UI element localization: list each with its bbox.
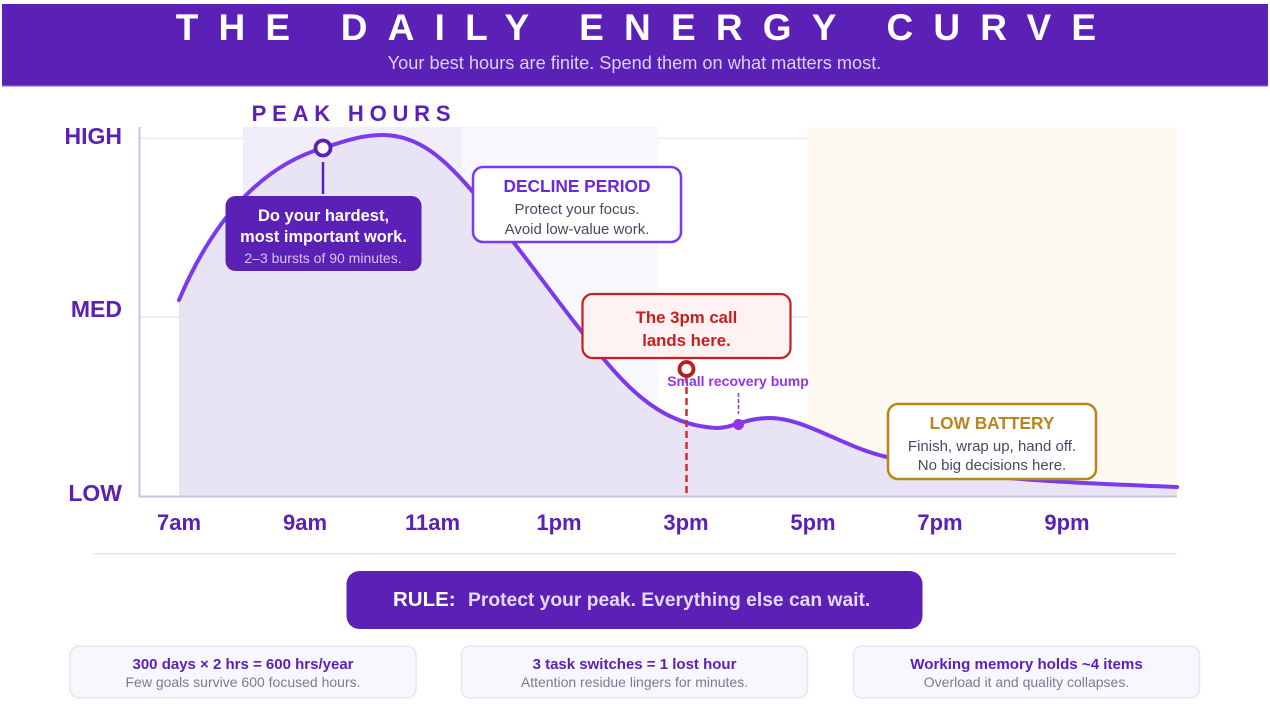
callout: decline period xyxy=(473,167,681,242)
stat card: 600 hours: 300 days × 2 hrs = 600 hrs/year xyxy=(132,656,354,673)
title: THE DAILY ENERGY CURVE xyxy=(176,7,1116,48)
rule banner xyxy=(346,571,922,629)
y axis labels: MED xyxy=(71,296,122,322)
stat card: 600 hours: Few goals survive 600 focused hours. xyxy=(125,674,361,690)
stat card: working memory: Working memory holds ~4 items xyxy=(910,656,1143,673)
stat card: task switches: Attention residue lingers for minutes. xyxy=(521,674,748,690)
x axis labels: 7am xyxy=(157,510,201,535)
y axis labels: HIGH xyxy=(64,123,122,149)
rule banner: Protect your peak. Everything else can wait. xyxy=(468,590,870,611)
axes xyxy=(140,127,1177,496)
x axis labels: 1pm xyxy=(536,510,582,535)
x axis labels: 3pm xyxy=(663,510,709,535)
callout: low battery: No big decisions here. xyxy=(918,457,1066,474)
band: low battery xyxy=(808,127,1177,497)
x axis labels: 9am xyxy=(283,510,327,535)
y axis labels xyxy=(64,123,122,506)
stat card: task switches xyxy=(462,646,808,698)
callout: 3pm call: The 3pm call xyxy=(636,308,737,327)
x axis labels xyxy=(157,510,1090,535)
area under curve xyxy=(179,135,1177,497)
x axis labels: 9pm xyxy=(1044,510,1090,535)
callout: decline period: Protect your focus. xyxy=(514,201,640,218)
rule banner: RULE: xyxy=(393,588,456,611)
callout: decline period: DECLINE PERIOD xyxy=(504,176,650,196)
stat card: working memory xyxy=(854,646,1200,698)
3pm marker xyxy=(680,362,694,495)
callout: low battery xyxy=(888,404,1096,479)
callout: peak work xyxy=(226,196,422,271)
x axis labels: 7pm xyxy=(917,510,963,535)
stat card: working memory: Overload it and quality collapses. xyxy=(924,674,1129,690)
y axis labels: LOW xyxy=(68,480,122,506)
stat card: 600 hours xyxy=(70,646,416,698)
energy curve xyxy=(179,135,1177,487)
callout: low battery: Finish, wrap up, hand off. xyxy=(908,438,1076,455)
callout: peak work: Do your hardest, xyxy=(258,207,389,225)
callout: 3pm call: lands here. xyxy=(642,331,731,350)
band: decline period xyxy=(462,127,658,497)
callout: low battery: LOW BATTERY xyxy=(930,413,1055,433)
chart xyxy=(64,101,1177,535)
x axis labels: 5pm xyxy=(790,510,836,535)
stat card: task switches: 3 task switches = 1 lost hour xyxy=(533,656,737,673)
header banner xyxy=(2,4,1268,86)
recovery bump label xyxy=(667,373,809,430)
peak hours label: PEAK HOURS xyxy=(252,101,456,126)
recovery bump label: Small recovery bump xyxy=(667,373,809,389)
peak marker xyxy=(316,140,330,194)
callout: decline period: Avoid low-value work. xyxy=(505,221,649,238)
callout: peak work: most important work. xyxy=(240,228,407,246)
subtitle: Your best hours are finite. Spend them on what matters most. xyxy=(388,53,881,73)
callout: 3pm call xyxy=(582,294,790,358)
band: peak hours xyxy=(243,127,462,497)
callout: peak work: 2–3 bursts of 90 minutes. xyxy=(244,250,402,266)
x axis labels: 11am xyxy=(405,510,460,535)
